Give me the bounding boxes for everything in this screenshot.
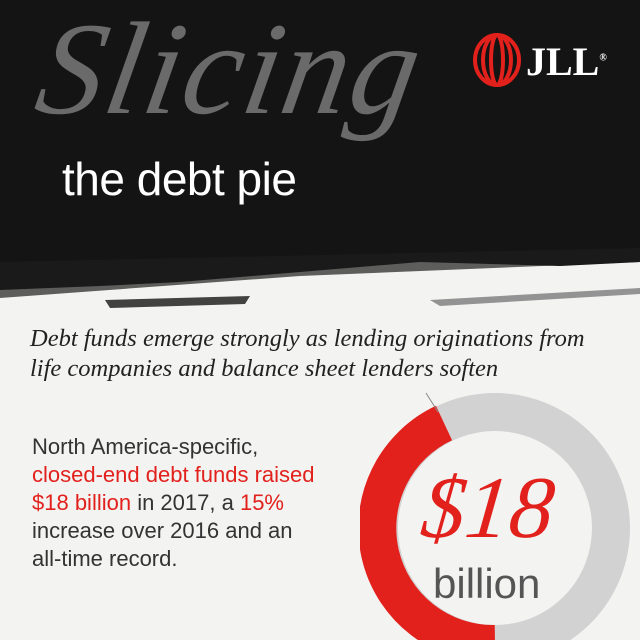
logo: JLL: JLL® [526, 39, 607, 84]
body text: increase over 2016 and an [32, 518, 293, 543]
body text: closed-end debt funds raised [32, 462, 315, 487]
stat label: billion: billion [433, 560, 540, 607]
subtitle: life companies and balance sheet lenders soften [30, 355, 498, 382]
body text: all-time record. [32, 546, 177, 571]
subtitle: Debt funds emerge strongly as lending originations from [30, 325, 585, 352]
logo: JLL [473, 33, 607, 87]
title: the debt pie: the debt pie [62, 153, 296, 205]
body text: North America-specific, [32, 434, 258, 459]
stat: $18: $18 [417, 460, 559, 557]
body text [32, 434, 315, 571]
subtitle [30, 325, 585, 382]
donut chart [360, 392, 630, 640]
body text: $18 billion in 2017, a 15% [32, 490, 284, 515]
